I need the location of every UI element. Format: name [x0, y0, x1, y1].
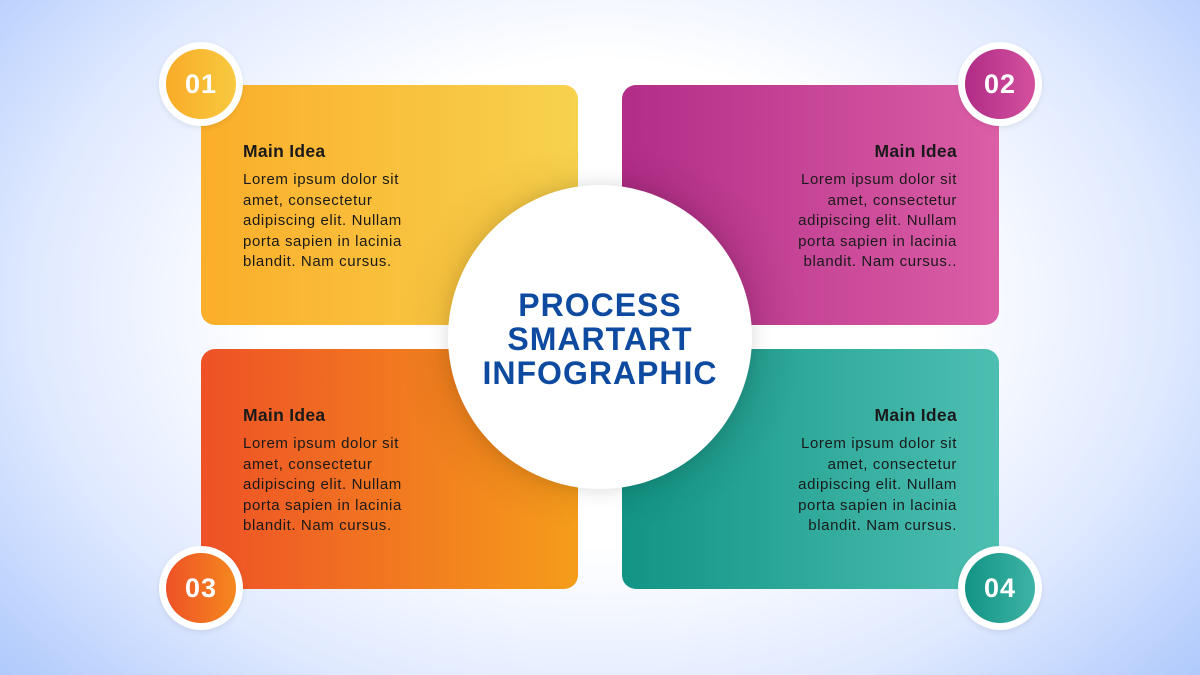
center circle title	[448, 185, 752, 489]
text: card 03	[243, 405, 402, 534]
center circle title: INFOGRAPHIC	[482, 355, 718, 391]
text: card 03: amet, consectetur	[243, 456, 372, 472]
text: card 02: porta sapien in lacinia	[798, 232, 957, 250]
text: card 01: Main Idea	[243, 141, 325, 161]
text: card 04: Main Idea	[875, 405, 957, 425]
text: card 03: porta sapien in lacinia	[243, 496, 402, 514]
text: card 04: porta sapien in lacinia	[798, 496, 957, 514]
text: card 03: blandit. Nam cursus.	[243, 517, 392, 534]
badge 01	[159, 42, 243, 126]
text: card 01: adipiscing elit. Nullam	[243, 212, 402, 229]
text: card 04: amet, consectetur	[828, 456, 957, 472]
badge 04	[958, 546, 1042, 630]
center circle title: SMARTART	[507, 321, 693, 357]
text: card 02: Main Idea	[875, 141, 957, 161]
panel: card 01	[201, 85, 578, 325]
text: card 03: Main Idea	[243, 405, 325, 425]
text: card 03: adipiscing elit. Nullam	[243, 476, 402, 493]
text: card 02	[798, 141, 957, 270]
text: card 02: amet, consectetur	[828, 192, 957, 208]
text: card 02: blandit. Nam cursus..	[804, 253, 957, 270]
panel: card 03	[201, 349, 578, 589]
center circle title: PROCESS	[518, 287, 682, 323]
text: card 02: Lorem ipsum dolor sit	[801, 171, 957, 188]
text: card 03: Lorem ipsum dolor sit	[243, 435, 399, 452]
panel: card 04	[622, 349, 999, 589]
text: card 04: adipiscing elit. Nullam	[798, 476, 957, 493]
badge 01: 01	[185, 69, 217, 99]
text: card 02: adipiscing elit. Nullam	[798, 212, 957, 229]
badge 02: 02	[984, 69, 1016, 99]
text: card 01: porta sapien in lacinia	[243, 232, 402, 250]
text: card 04: Lorem ipsum dolor sit	[801, 435, 957, 452]
text: card 04: blandit. Nam cursus.	[808, 517, 957, 534]
panel: card 02	[622, 85, 999, 325]
badge 03	[159, 546, 243, 630]
text: card 01	[243, 141, 402, 270]
badge 03: 03	[185, 573, 217, 603]
text: card 01: blandit. Nam cursus.	[243, 253, 392, 270]
text: card 01: amet, consectetur	[243, 192, 372, 208]
badge 04: 04	[984, 573, 1016, 603]
text: card 01: Lorem ipsum dolor sit	[243, 171, 399, 188]
badge 02	[958, 42, 1042, 126]
text: card 04	[798, 405, 957, 534]
